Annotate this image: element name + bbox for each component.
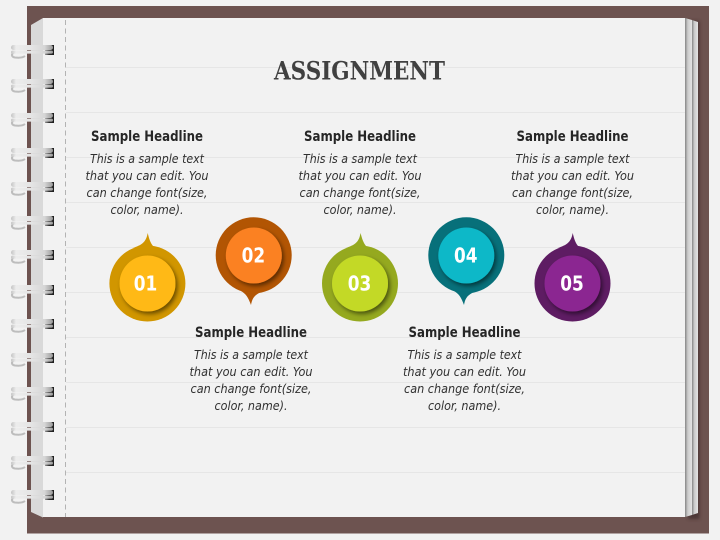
- text block: step 1: can change font(size,: [86, 186, 208, 200]
- text block: step 4: can change font(size,: [404, 382, 525, 396]
- right page edges: [685, 18, 700, 519]
- text block: step 4: This is a sample text: [408, 348, 522, 362]
- text block: step 1: [86, 129, 209, 217]
- text block: step 1: color, name).: [110, 203, 184, 217]
- marker 04: [428, 217, 504, 305]
- text block: step 1: Sample Headline: [91, 129, 203, 145]
- text block: step 5: [511, 129, 634, 217]
- marker 02: [216, 217, 292, 305]
- text block: step 4: color, name).: [428, 399, 501, 413]
- text block: step 1: This is a sample text: [90, 152, 205, 166]
- text block: step 5: Sample Headline: [516, 129, 628, 145]
- text block: step 3: This is a sample text: [303, 152, 418, 166]
- text block: step 3: color, name).: [324, 203, 396, 217]
- text block: step 2: color, name).: [214, 399, 288, 413]
- text block: step 5: that you can edit. You: [511, 169, 634, 183]
- text block: step 2: This is a sample text: [194, 348, 309, 362]
- spiral binding rings: [11, 45, 54, 503]
- text block: step 5: This is a sample text: [516, 152, 630, 166]
- marker 05: 05: [560, 271, 584, 295]
- marker 03: [322, 233, 398, 322]
- text block: step 4: [403, 325, 526, 413]
- text block: step 2: can change font(size,: [190, 382, 312, 396]
- title: ASSIGNMENT: [273, 56, 445, 86]
- text block: step 5: can change font(size,: [512, 186, 633, 200]
- marker 02: 02: [242, 244, 265, 268]
- text block: step 2: [190, 325, 313, 413]
- marker 03: 03: [348, 271, 371, 295]
- text block: step 5: color, name).: [536, 203, 609, 217]
- text block: step 4: Sample Headline: [408, 325, 520, 341]
- text block: step 3: that you can edit. You: [298, 169, 422, 183]
- left page strip: [31, 18, 43, 518]
- marker 01: 01: [134, 271, 157, 295]
- text block: step 4: that you can edit. You: [403, 365, 526, 379]
- text block: step 3: [298, 129, 422, 217]
- text block: step 2: that you can edit. You: [190, 365, 313, 379]
- text block: step 3: Sample Headline: [304, 129, 416, 145]
- marker 01: [109, 233, 185, 322]
- marker 04: 04: [454, 244, 478, 268]
- text block: step 2: Sample Headline: [195, 325, 307, 341]
- text block: step 1: that you can edit. You: [86, 169, 209, 183]
- marker 05: [534, 233, 610, 322]
- text block: step 3: can change font(size,: [300, 186, 420, 200]
